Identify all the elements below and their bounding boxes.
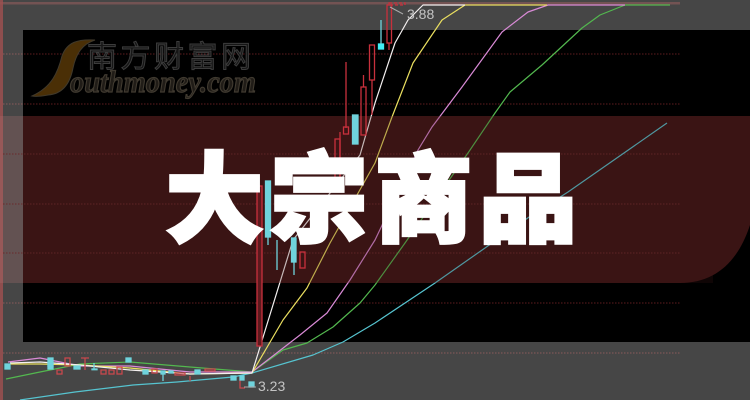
line: cyan MA (20, 123, 667, 400)
line: yellow MA (10, 5, 547, 374)
title band (23, 116, 750, 283)
top edge line (0, 2, 680, 4)
price label low (244, 378, 285, 394)
price label low: 3.23 (258, 378, 285, 394)
line: white MA (10, 5, 465, 374)
price label high (390, 6, 434, 22)
cyan candles (266, 20, 384, 275)
watermark: Southmoney logo: 南方财富网 (87, 41, 254, 74)
red candles (257, 3, 405, 346)
band dimming over lines (23, 116, 713, 283)
candlestick chart (257, 3, 405, 346)
title: 大宗商品 (166, 146, 584, 255)
band grid lines (3, 154, 680, 253)
band left edge (0, 116, 23, 283)
line: pink MA (8, 5, 625, 372)
left edge line (0, 0, 3, 400)
watermark: Southmoney logo (32, 40, 256, 99)
small candles before the breakout (5, 358, 254, 388)
watermark: Southmoney logo: outhmoney.com (70, 64, 256, 99)
price label high: 3.88 (407, 6, 434, 22)
grid lines (3, 54, 680, 353)
